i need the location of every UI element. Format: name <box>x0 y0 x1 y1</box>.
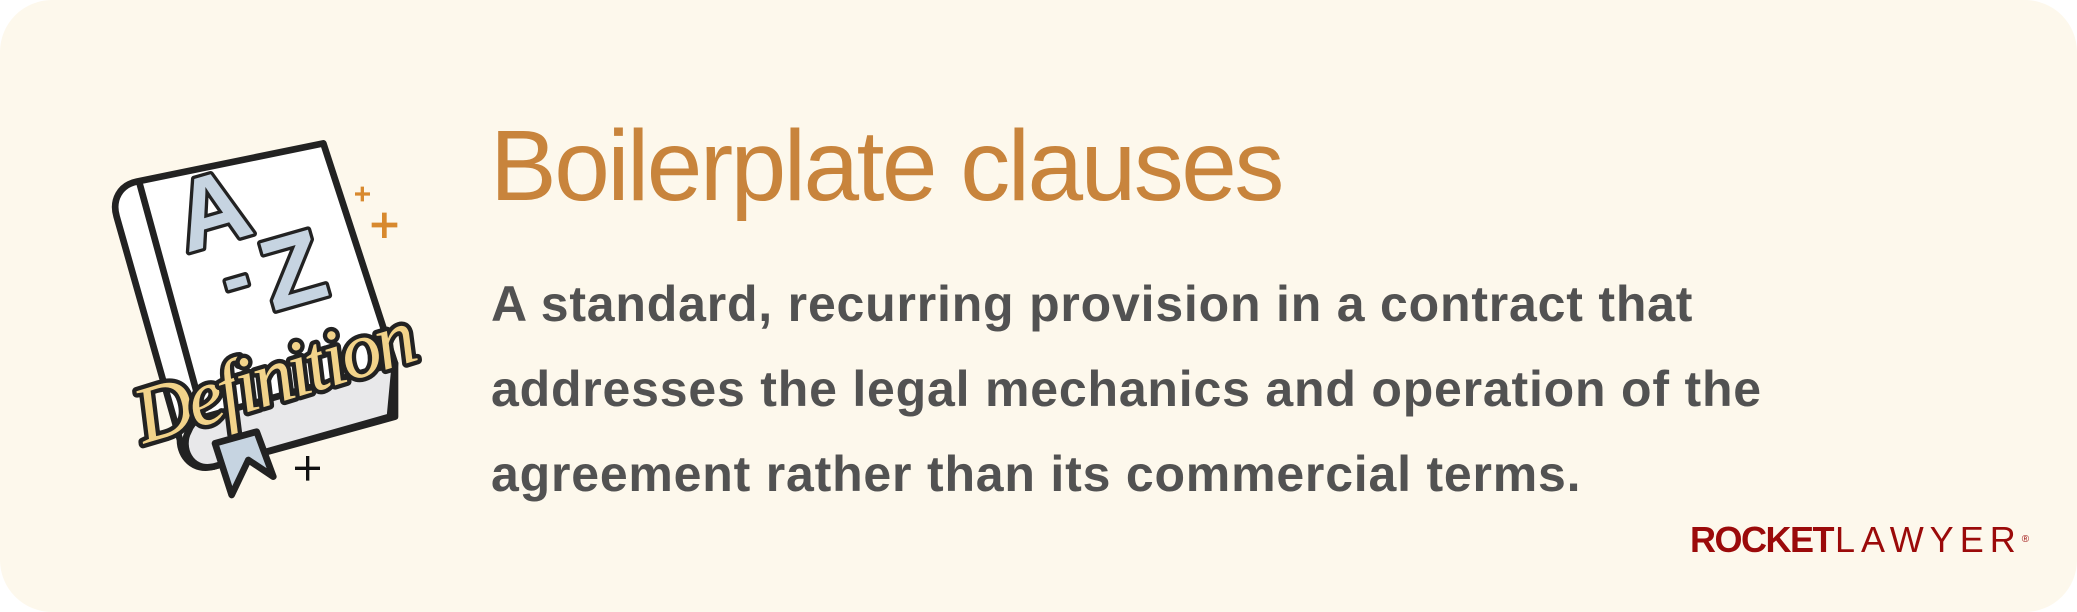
icon: definition book <box>112 140 426 498</box>
icon: definition book: Definition <box>122 292 426 461</box>
definition text: agreement rather than its commercial terms. <box>491 446 1581 502</box>
definition text <box>491 276 1762 502</box>
icon: definition book: - <box>210 230 260 323</box>
definition text: addresses the legal mechanics and operation of the <box>491 361 1762 417</box>
definition text: A standard, recurring provision in a contract that <box>491 276 1693 332</box>
icon: definition book: A <box>162 146 262 274</box>
title: Boilerplate clauses <box>490 110 1282 222</box>
icon: definition book: Z <box>248 208 338 332</box>
logo: Rocket Lawyer: ROCKETLAWYER® <box>1690 519 2029 560</box>
